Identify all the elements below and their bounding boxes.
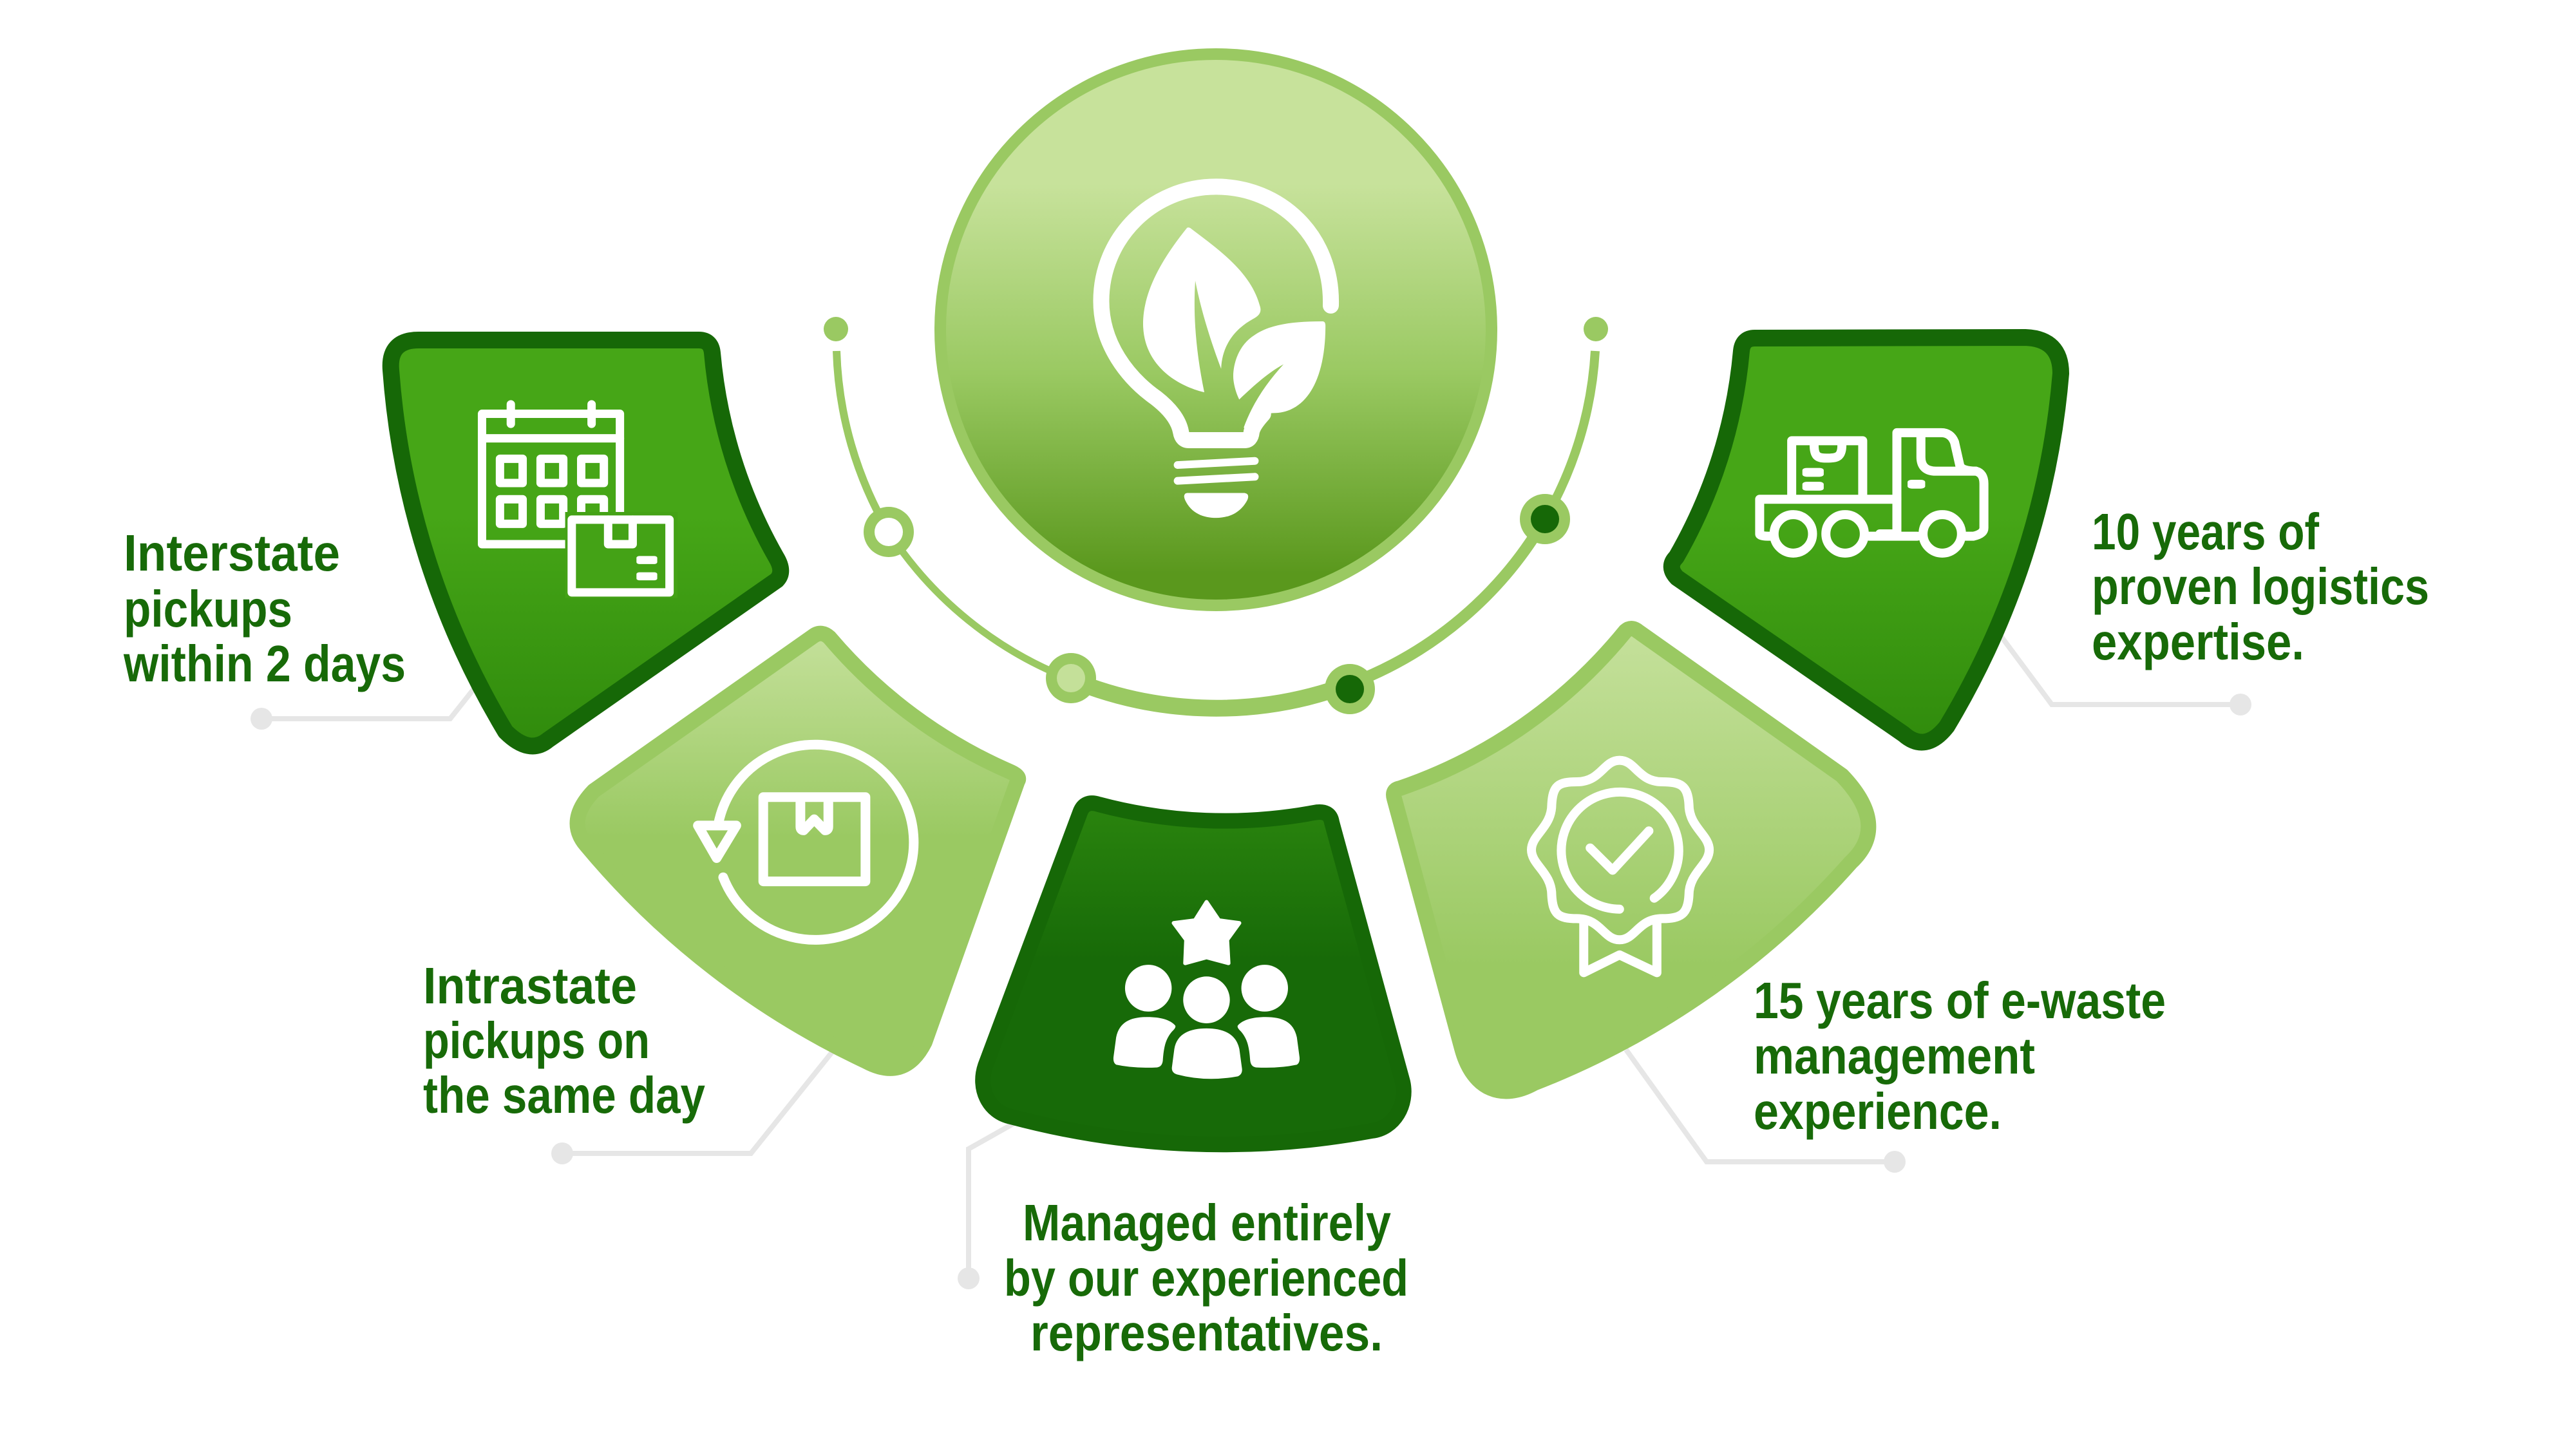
text: 15 years of e-waste management experience: experience. [1754, 1083, 2002, 1140]
text: intrastate pickups on the same day: pickups on [423, 1012, 650, 1069]
icon: team with star [1113, 902, 1300, 1079]
connector: interstate [251, 681, 480, 730]
text: intrastate pickups on the same day: Intrastate [423, 957, 637, 1014]
text: 10 years of proven logistics expertise [2092, 503, 2429, 670]
connector: representatives [958, 1123, 1014, 1289]
text: 15 years of e-waste management experience: management [1754, 1027, 2035, 1084]
text: 15 years of e-waste management experience: 15 years of e-waste [1754, 972, 2166, 1029]
connector: e-waste experience [1626, 1050, 1906, 1173]
panel: experienced representatives [983, 803, 1408, 1361]
text: managed entirely by our experienced representatives: by our experienced [1004, 1249, 1408, 1307]
connector: logistics expertise [2000, 634, 2251, 715]
icon: parcel with return arrow [698, 744, 914, 940]
panel: interstate pickups [123, 340, 781, 746]
connector: intrastate [551, 1050, 834, 1164]
text: managed entirely by our experienced representatives [1004, 1194, 1408, 1361]
icon: delivery truck [1759, 433, 1984, 553]
icon: award badge with check [1531, 761, 1709, 972]
text: 10 years of proven logistics expertise: 10 years of [2092, 503, 2319, 560]
text: interstate pickups within 2 days [123, 524, 406, 692]
text: 15 years of e-waste management experience [1754, 972, 2166, 1140]
icon: light bulb with leaves [1101, 187, 1331, 518]
text: managed entirely by our experienced representatives: representatives. [1030, 1304, 1383, 1361]
text: intrastate pickups on the same day [423, 957, 705, 1124]
panel: intrastate pickups [423, 634, 1018, 1124]
central circle with bulb icon [940, 54, 1492, 605]
icon: calendar and parcel [482, 404, 677, 598]
text: interstate pickups within 2 days: within 2 days [123, 635, 406, 692]
panel: e-waste experience [1394, 629, 2166, 1140]
arc with progress nodes [824, 317, 1608, 714]
panel: logistics expertise [1672, 337, 2429, 742]
text: managed entirely by our experienced representatives: Managed entirely [1023, 1194, 1391, 1251]
text: 10 years of proven logistics expertise: expertise. [2092, 613, 2304, 670]
text: interstate pickups within 2 days: Interstate [124, 524, 340, 582]
text: interstate pickups within 2 days: pickups [124, 580, 292, 638]
text: 10 years of proven logistics expertise: proven logistics [2092, 558, 2429, 615]
text: intrastate pickups on the same day: the same day [423, 1066, 705, 1124]
